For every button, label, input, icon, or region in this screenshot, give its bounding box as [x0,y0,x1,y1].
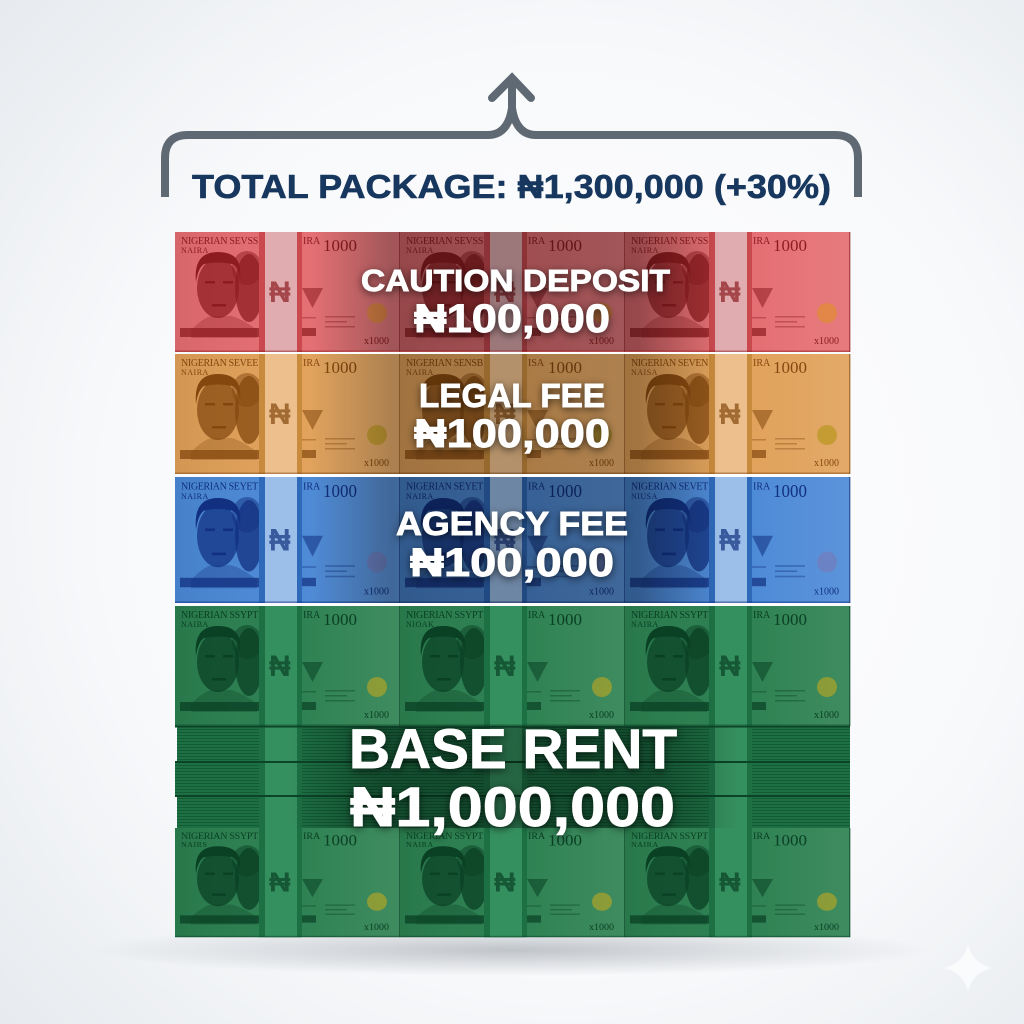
note 2: ISA [528,358,545,369]
note 1: NAIRA [181,246,209,255]
note 1: x1000 [364,458,389,469]
note 2: NAIRA [406,246,434,255]
label backing shade [290,232,740,828]
note 3: IRA [753,831,770,842]
note 2: 1000 [548,358,582,377]
note 2: 1000 [548,610,582,629]
note 1: 1000 [323,358,357,377]
note 1: NAIRS [181,840,207,849]
note 3: 1000 [773,358,807,377]
note 3: NIUSA [631,492,658,501]
note 1: x1000 [364,336,389,347]
note 2: ₦ [494,522,516,558]
note 2: x1000 [589,922,614,933]
label: agency fee [396,505,628,585]
note 3: ₦ [719,868,741,898]
note 2: 1000 [548,832,582,849]
label: caution deposit: ₦100,000 [414,297,610,341]
note 2: ₦ [494,868,516,898]
note 2: NAIRA [406,840,434,849]
note 2: IRA [528,831,545,842]
note 3: x1000 [814,922,839,933]
panel: agency fee bundle row [175,477,850,603]
note 3 [625,232,850,352]
note 3: x1000 [814,336,839,347]
note 3 [625,477,850,603]
note 3 [625,354,850,474]
note 3 [625,606,850,726]
note 1: NAIBA [181,620,209,629]
note 1: x1000 [364,922,389,933]
note 1 [175,232,400,352]
note 1: NAIRA [181,492,209,501]
note 1: IRA [303,610,321,621]
panel: legal fee bundle row [175,354,850,474]
note 2 [400,354,626,474]
note 3: IRA [753,358,771,369]
note 1: NAIRA [181,368,209,377]
note 3: x1000 [814,710,839,721]
note 2: NIGERIAN SENSB [406,358,484,369]
panel: caution deposit bundle row [175,232,850,352]
note 3: ₦ [719,522,741,558]
note 3: NIGERIAN SEVSS [631,236,709,247]
note 3: 1000 [773,236,807,255]
label: caution deposit [361,263,670,341]
note 1: x1000 [364,710,389,721]
label: base rent: BASE RENT [349,717,677,780]
note 1: NIGERIAN SEVEE [181,358,259,369]
note 3: NIGERIAN SEVET [631,481,709,493]
note 2: IRA [528,236,546,247]
note 3: ₦ [719,650,741,683]
note 2: NAIRA [406,368,434,377]
note 1 [175,354,400,474]
note 3: NIGERIAN SEVEN [631,358,709,369]
note 2: NAIRA [406,492,434,501]
note 1: IRA [303,481,321,493]
note 2: x1000 [589,336,614,347]
note 2: ₦ [494,398,516,431]
note 1: IRA [303,236,321,247]
note 2: 1000 [548,481,582,501]
floor shadow [92,924,932,976]
label: agency fee: AGENCY FEE [396,505,628,542]
note 2: x1000 [589,586,614,598]
note 1: NIGERIAN SSYPT [181,831,259,842]
panel: base rent stacked edges [175,726,850,828]
note 1 [175,606,400,726]
note 1: NIGERIAN SSYPT [181,610,259,621]
note 2 [400,477,626,603]
note 3: x1000 [814,458,839,469]
note 3: x1000 [814,586,839,598]
label: base rent: ₦1,000,000 [350,775,675,838]
note 2: ₦ [494,276,516,309]
note 3: NAIRA [631,840,659,849]
note 2: x1000 [589,458,614,469]
note 1: 1000 [323,832,357,849]
label: base rent [349,717,677,838]
note 2 [400,828,626,937]
note 1 [175,828,400,937]
note 3: NIGERIAN SSYPT [631,610,709,621]
note 2: NIOAK [406,620,434,629]
note 1: ₦ [269,522,291,558]
note 1: ₦ [269,650,291,683]
note 3: 1000 [773,610,807,629]
icon: sparkle [943,944,993,992]
note 2: x1000 [589,710,614,721]
note 3: ₦ [719,398,741,431]
note 2: NIGERIAN SEVSS [406,236,484,247]
note 2 [400,606,626,726]
note 3: NAIRA [631,246,659,255]
note 1: ₦ [269,868,291,898]
panel: base rent top notes [175,606,850,726]
note 2: NIGERIAN SEYET [406,481,484,493]
note 3: 1000 [773,832,807,849]
note 3 [625,828,850,937]
note 1: NIGERIAN SEVSS [181,236,259,247]
note 2: IRA [528,610,546,621]
note 3: NAISA [631,368,658,377]
note 2: NIGERIAN SSYPT [406,831,484,842]
note 3: IRA [753,236,771,247]
note 1: NIGERIAN SEYET [181,481,259,493]
note 1: ₦ [269,276,291,309]
total bracket with arrow [165,78,858,197]
note 1: ₦ [269,398,291,431]
note 3: IRA [753,481,771,493]
note 1: 1000 [323,481,357,501]
title: TOTAL PACKAGE: ₦1,300,000 (+30%) [192,168,831,205]
note 2: 1000 [548,236,582,255]
note 3: NIGERIAN SSYPT [631,831,709,842]
panel: base rent bottom notes [175,828,850,937]
note 3: NAIRA [631,620,659,629]
note 1: 1000 [323,236,357,255]
label: legal fee: ₦100,000 [414,412,610,456]
note 1: IRA [303,358,321,369]
label: agency fee: ₦100,000 [410,541,614,585]
label: legal fee: LEGAL FEE [419,377,605,414]
label: legal fee [414,377,610,456]
note 3: 1000 [773,481,807,501]
note 1 [175,477,400,603]
note 1: IRA [303,831,320,842]
note 3: ₦ [719,276,741,309]
note 2: NIGERIAN SSYPT [406,610,484,621]
note 1: x1000 [364,586,389,598]
note 1: 1000 [323,610,357,629]
note 2: IRA [528,481,546,493]
label: caution deposit: CAUTION DEPOSIT [361,263,670,298]
note 2: ₦ [494,650,516,683]
note 2 [400,232,626,352]
note 3: IRA [753,610,771,621]
